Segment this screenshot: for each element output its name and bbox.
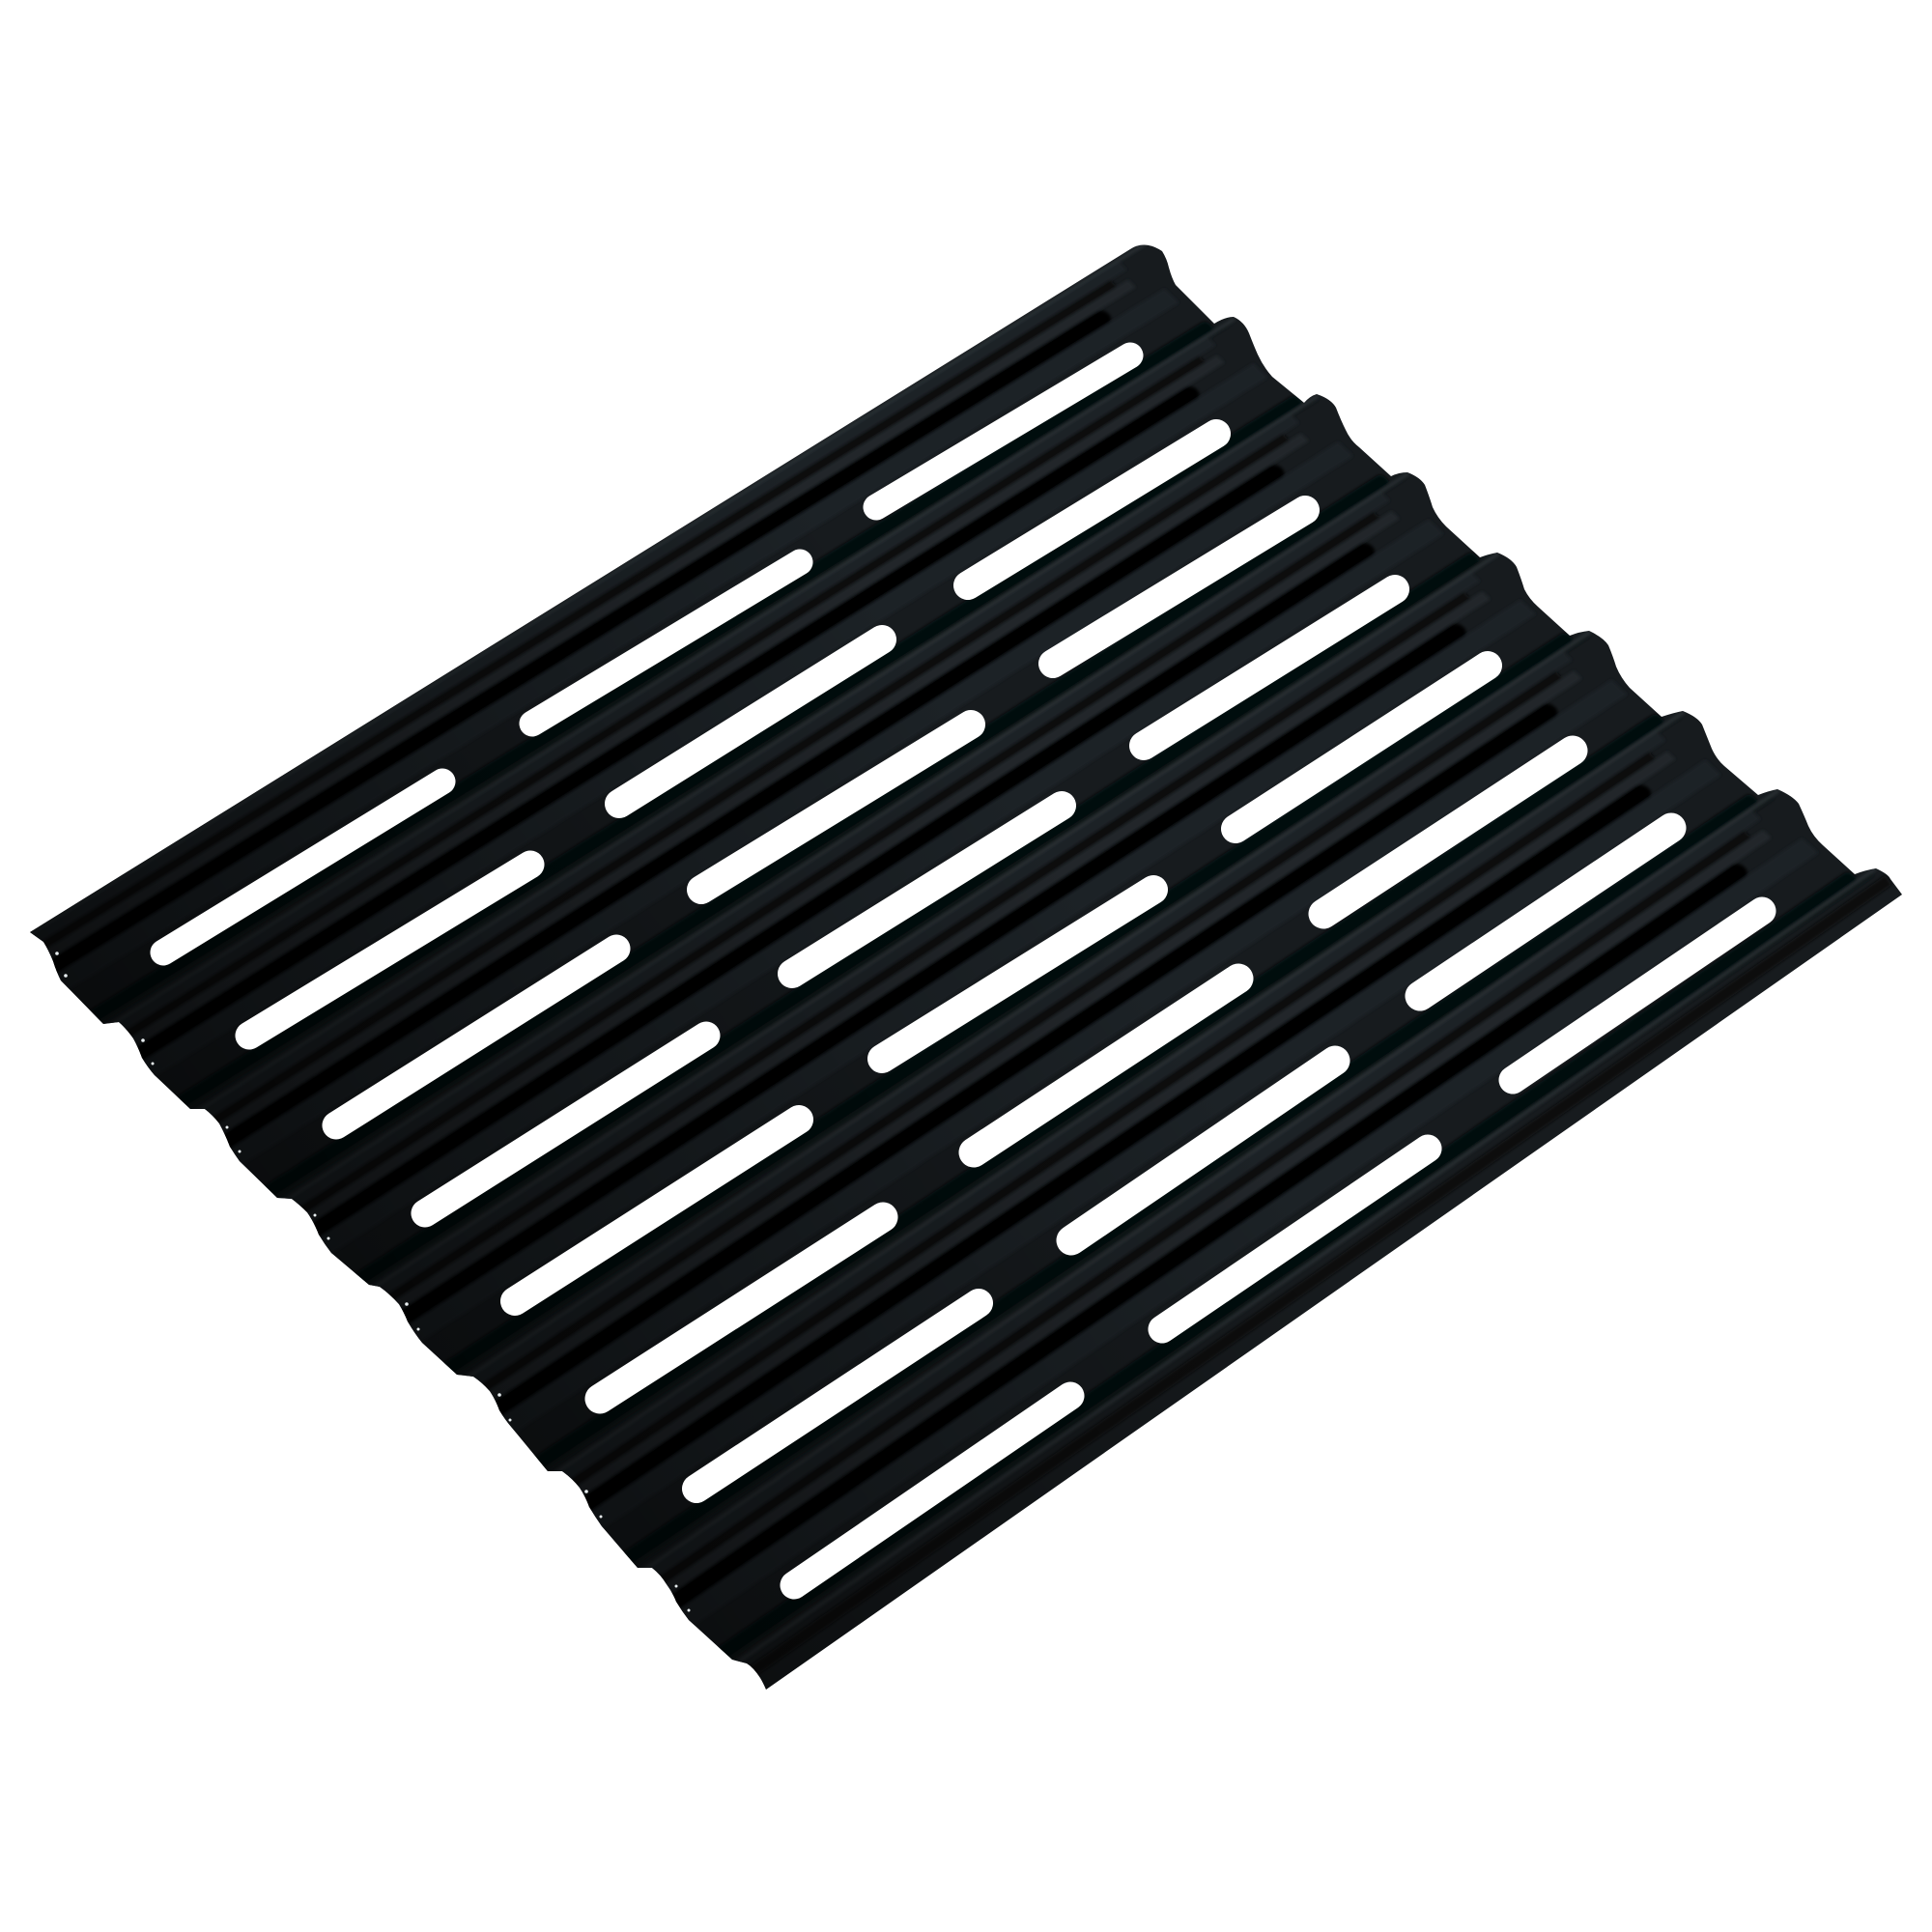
corrugated black sheet [0, 193, 1932, 1739]
product illustration [30, 245, 1902, 1690]
slots cut through the sheet [163, 355, 1762, 1585]
white enamel specks on the left edge [55, 952, 690, 1611]
